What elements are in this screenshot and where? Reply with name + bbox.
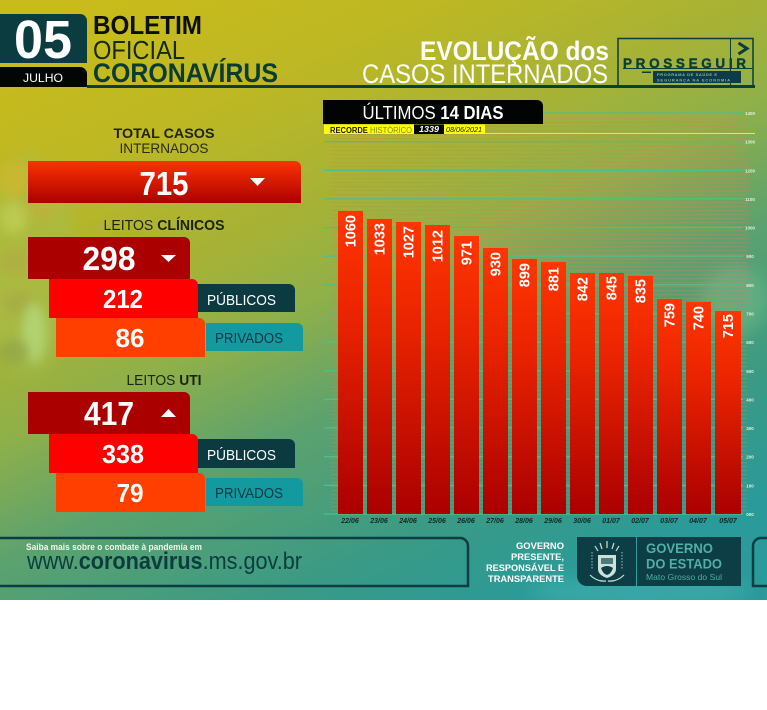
bar chart: 715 xyxy=(721,314,737,338)
bar chart: 27/06 xyxy=(485,518,504,525)
chart axis labels: 900 xyxy=(746,254,754,259)
footer: right panel edge xyxy=(753,538,767,586)
bar chart: 04/07 xyxy=(689,518,708,525)
panel: leitos clinicos: PÚBLICOS xyxy=(207,292,276,309)
chart axis labels: 300 xyxy=(746,426,754,431)
panel: leitos uti: 338 xyxy=(102,439,144,469)
chart axis labels: 100 xyxy=(746,483,754,488)
bar chart: 30/06 xyxy=(573,518,591,525)
bar chart: 25/06 xyxy=(427,518,446,525)
bar chart: 05/07 xyxy=(719,518,738,525)
panel: leitos clinicos xyxy=(28,217,303,357)
date badge: JULHO xyxy=(23,71,63,85)
bar chart: 28/06 xyxy=(514,518,533,525)
panel: total casos xyxy=(28,125,301,203)
title: OFICIAL xyxy=(93,35,185,65)
bar chart: 1027 xyxy=(402,226,418,258)
panel: total casos: TOTAL CASOS xyxy=(114,125,214,141)
date badge: 05 xyxy=(14,10,72,70)
chart axis labels: 400 xyxy=(746,397,754,402)
chart grid lines xyxy=(324,113,747,514)
bar chart: 1012 xyxy=(430,230,446,262)
record line: 08/06/2021 xyxy=(446,125,482,134)
chart axis labels xyxy=(745,111,756,517)
panel: leitos uti: 79 xyxy=(116,478,144,508)
panel: leitos uti: PÚBLICOS xyxy=(207,447,276,464)
chart title: CASOS INTERNADOS xyxy=(362,59,608,89)
bar chart: 1060 xyxy=(344,215,360,247)
chart title xyxy=(362,35,609,89)
bar chart: 971 xyxy=(460,241,476,265)
record line: RECORDE HISTÓRICO xyxy=(330,126,412,135)
bar chart: 845 xyxy=(604,276,620,300)
bar chart: 02/07 xyxy=(631,518,650,525)
logo: prosseguir xyxy=(618,38,753,86)
bar chart: 29/06 xyxy=(543,518,562,525)
bar chart: 899 xyxy=(518,263,534,287)
chart axis labels: 200 xyxy=(746,455,754,460)
footer: slogan: PRESENTE, xyxy=(511,552,564,563)
bar chart: 930 xyxy=(488,252,504,276)
bar chart: 1033 xyxy=(372,223,388,255)
chart axis labels: 600 xyxy=(746,340,754,345)
footer: government logo: Mato Grosso do Sul xyxy=(646,572,722,582)
chart header: ÚLTIMOS 14 DIAS xyxy=(362,102,504,123)
bar chart: 759 xyxy=(662,303,678,327)
panel: leitos uti: LEITOS UTI xyxy=(126,372,202,389)
chart axis labels: 000 xyxy=(746,512,754,517)
title xyxy=(93,10,278,88)
panel: leitos uti: 417 xyxy=(84,395,134,432)
panel: leitos clinicos: 298 xyxy=(82,240,136,277)
panel: leitos uti xyxy=(28,372,303,512)
logo: prosseguir: PROSSEGUIR xyxy=(623,56,746,71)
bar chart: 842 xyxy=(576,277,592,301)
bar chart: 881 xyxy=(546,267,562,291)
bar chart: 01/07 xyxy=(602,518,621,525)
chart header xyxy=(323,100,543,124)
footer: government logo xyxy=(577,537,741,586)
chart axis labels: 1200 xyxy=(745,168,756,173)
bar chart: 26/06 xyxy=(456,518,475,525)
panel: leitos clinicos: 212 xyxy=(103,284,143,314)
footer: slogan: TRANSPARENTE xyxy=(488,574,564,585)
footer: government logo: GOVERNO xyxy=(646,540,713,556)
bar chart: 835 xyxy=(634,279,650,303)
footer: government logo: DO ESTADO xyxy=(646,556,722,572)
panel: leitos uti: PRIVADOS xyxy=(215,485,283,502)
logo: prosseguir: PROGRAMA DE SAÚDE E xyxy=(657,72,717,77)
bar chart: 740 xyxy=(692,306,708,330)
chart axis labels: 800 xyxy=(746,283,754,288)
bar chart: 22/06 xyxy=(340,518,359,525)
chart axis labels: 700 xyxy=(746,312,754,316)
bar chart: 24/06 xyxy=(398,518,417,525)
chart axis labels: 1400 xyxy=(745,111,756,116)
record line xyxy=(324,124,755,135)
bar chart xyxy=(338,211,741,525)
chart title: EVOLUÇÃO dos xyxy=(420,35,609,66)
virus illustration xyxy=(0,155,767,610)
panel: leitos clinicos: PRIVADOS xyxy=(215,330,283,347)
panel: total casos: INTERNADOS xyxy=(120,140,208,156)
bar chart: 03/07 xyxy=(660,518,679,525)
panel: total casos: 715 xyxy=(140,165,188,202)
footer: slogan: GOVERNO xyxy=(516,541,564,552)
footer: website panel: www.coronavirus.ms.gov.br xyxy=(26,548,302,575)
footer: website panel xyxy=(0,538,468,586)
title: CORONAVÍRUS xyxy=(93,57,278,88)
footer: slogan xyxy=(486,541,564,585)
chart axis labels: 500 xyxy=(746,369,754,374)
chart axis labels: 1100 xyxy=(745,197,755,202)
bar chart: 23/06 xyxy=(369,518,388,525)
chart axis labels: 1000 xyxy=(745,226,756,231)
footer: slogan: RESPONSÁVEL E xyxy=(486,563,564,574)
chart axis labels: 1300 xyxy=(745,140,756,145)
footer: website panel: Saiba mais sobre o combate à pandemia em xyxy=(26,542,202,553)
panel: leitos clinicos: LEITOS CLÍNICOS xyxy=(104,217,224,234)
logo: prosseguir: SEGURANÇA NA ECONOMIA xyxy=(657,78,730,82)
title: BOLETIM xyxy=(93,10,202,40)
header rule xyxy=(87,85,755,88)
date badge xyxy=(0,10,87,87)
panel: leitos clinicos: 86 xyxy=(116,323,144,353)
record line: 1339 xyxy=(419,125,440,134)
